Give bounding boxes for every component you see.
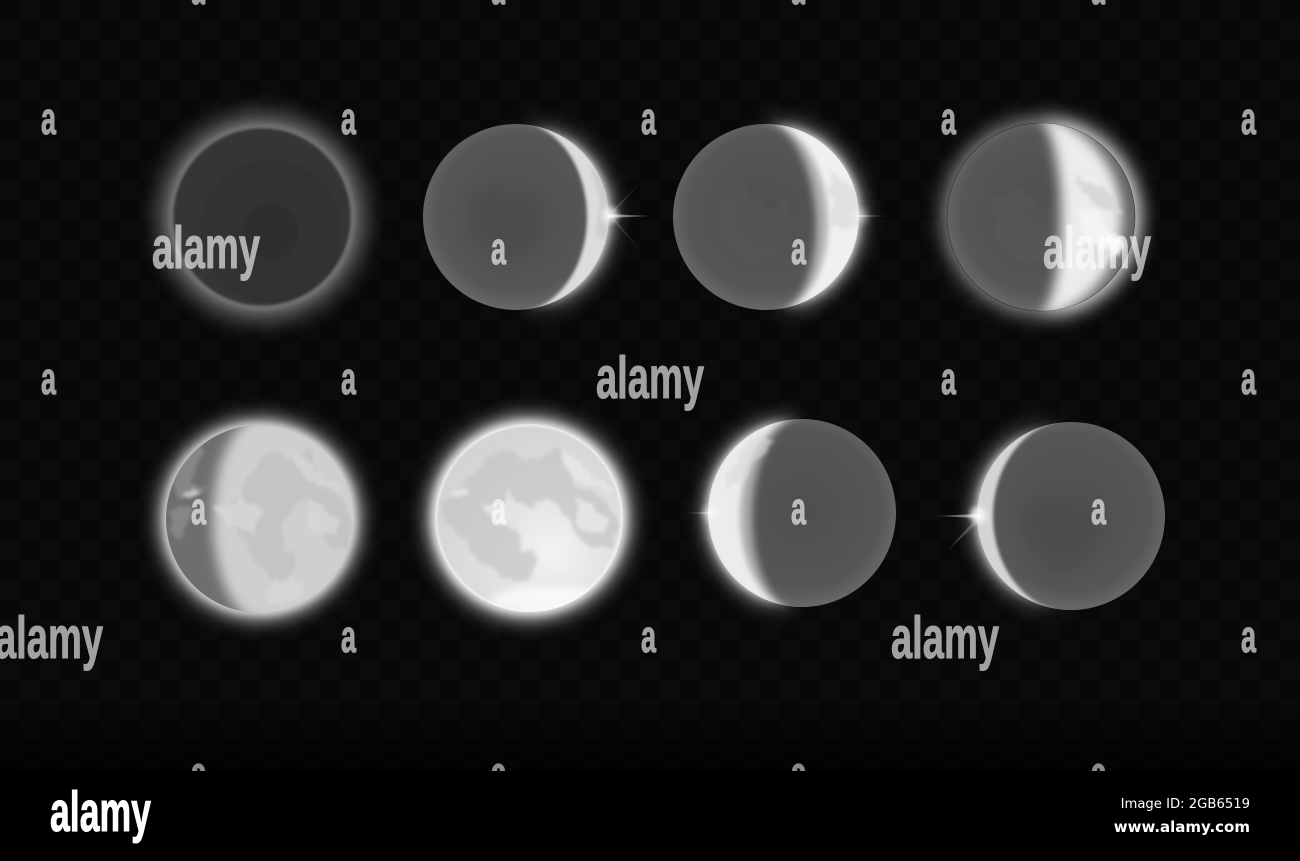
star flare xyxy=(680,506,717,520)
moon phase: waning crescent thin xyxy=(930,420,1165,612)
repeating watermark letters: a xyxy=(1241,93,1257,144)
repeating watermark letters xyxy=(41,0,1257,662)
star flare xyxy=(930,482,986,550)
repeating watermark letters: a xyxy=(941,93,957,144)
cut-off watermark letters above strip xyxy=(192,763,1105,771)
repeating watermark letters: a xyxy=(491,223,507,274)
moon phase: waxing crescent xyxy=(673,113,892,314)
repeating watermark letters: a xyxy=(791,483,807,534)
repeating watermark wordmarks: alamy xyxy=(152,215,260,281)
moon phase: thin waxing crescent xyxy=(423,122,655,312)
star flare xyxy=(853,209,892,223)
bottom black strip xyxy=(0,771,1300,861)
repeating watermark wordmarks: alamy xyxy=(0,605,103,671)
moon phase: new moon ring xyxy=(166,121,358,313)
repeating watermark letters: a xyxy=(491,483,507,534)
repeating watermark letters: a xyxy=(41,93,57,144)
repeating watermark wordmarks: alamy xyxy=(596,345,704,411)
moon phase: full moon xyxy=(430,419,628,617)
moon phase: waxing gibbous xyxy=(162,416,366,622)
star flare xyxy=(602,183,655,250)
repeating watermark letters: a xyxy=(641,93,657,144)
moon phase: first quarter xyxy=(944,114,1138,320)
moon phase: waning crescent wide xyxy=(680,412,896,611)
repeating watermark letters: a xyxy=(341,353,357,404)
image id: Image ID: 2GB6519 xyxy=(1121,797,1250,812)
repeating watermark letters: a xyxy=(1241,353,1257,404)
repeating watermark letters: a xyxy=(641,611,657,662)
repeating watermark wordmarks: alamy xyxy=(1043,215,1151,281)
repeating watermark letters: a xyxy=(941,353,957,404)
repeating watermark letters: a xyxy=(341,93,357,144)
alamy logo: alamy xyxy=(50,780,151,844)
repeating watermark letters: a xyxy=(41,353,57,404)
website url: www.alamy.com xyxy=(1114,818,1250,836)
repeating watermark wordmarks xyxy=(0,215,1151,671)
repeating watermark letters: a xyxy=(341,611,357,662)
repeating watermark letters: a xyxy=(1091,483,1107,534)
repeating watermark letters: a xyxy=(191,483,207,534)
repeating watermark letters: a xyxy=(791,223,807,274)
repeating watermark wordmarks: alamy xyxy=(891,605,999,671)
repeating watermark letters: a xyxy=(1241,611,1257,662)
